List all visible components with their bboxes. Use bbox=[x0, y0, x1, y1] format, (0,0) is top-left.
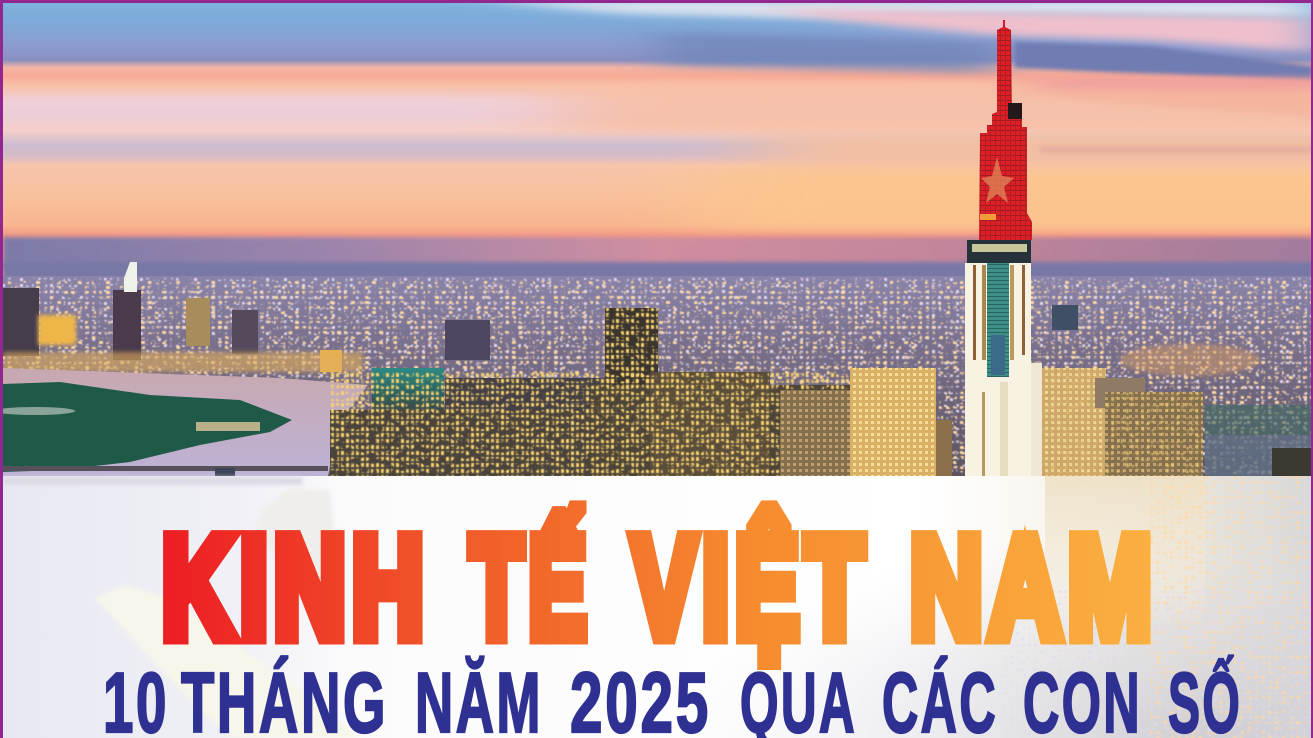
dark tower bbox=[605, 308, 658, 390]
subtitle: 10 THÁNG NĂM 2025 QUA CÁC CON SỐ bbox=[103, 655, 1242, 738]
river bbox=[3, 368, 368, 476]
star on the crown bbox=[981, 157, 1014, 203]
barge bbox=[196, 422, 260, 431]
title: KINH TẾ VIỆT NAM: KINH bbox=[162, 508, 430, 668]
bridge bbox=[3, 466, 328, 476]
faded lower photo bbox=[0, 476, 1313, 738]
sky bbox=[0, 0, 1313, 284]
title: KINH TẾ VIỆT NAM: NAM bbox=[910, 508, 1158, 668]
green island bbox=[3, 382, 292, 472]
teal glass core bbox=[987, 263, 1009, 377]
Landmark 81 tower bbox=[965, 20, 1042, 476]
black crown detail bbox=[1008, 103, 1022, 119]
teal building bbox=[372, 368, 444, 410]
white shaft bbox=[965, 263, 1031, 476]
distant city bbox=[0, 262, 1313, 476]
title: KINH TẾ VIỆT NAM: TẾ bbox=[470, 508, 592, 668]
glow near crown base bbox=[980, 214, 996, 220]
dark band bbox=[967, 240, 1031, 263]
title: KINH TẾ VIỆT NAM: VIỆT bbox=[632, 508, 870, 668]
apartment blocks bbox=[330, 368, 1203, 476]
sandy patch on island bbox=[0, 407, 75, 415]
tower spire and red crown bbox=[979, 20, 1032, 240]
title: KINH TẾ VIỆT NAM bbox=[162, 508, 1158, 668]
